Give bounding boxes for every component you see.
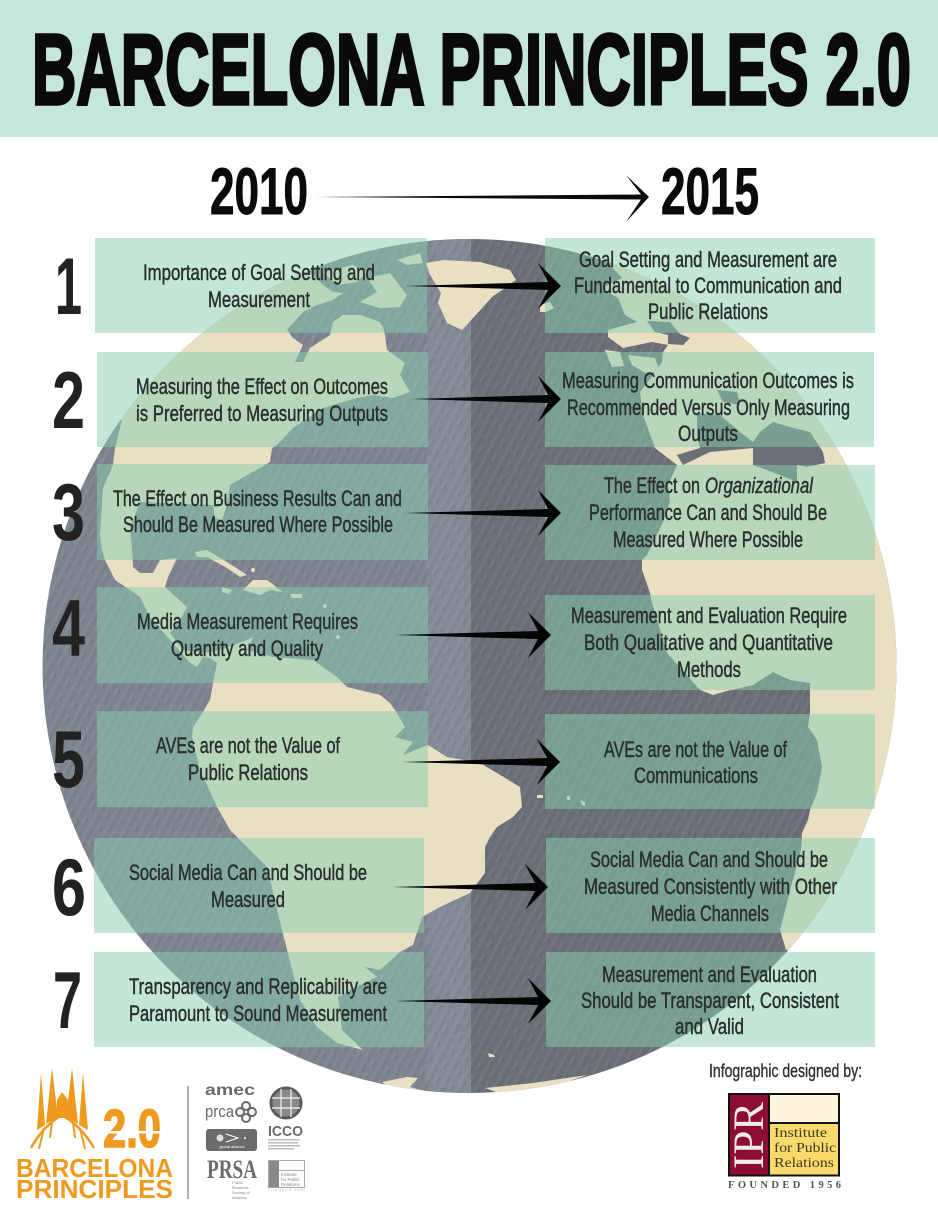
- text: 2010 principles: Paramount to Sound Measurement: [129, 1001, 387, 1026]
- text: 2010 principles: Transparency and Replicability are: [129, 974, 387, 999]
- text: 2015 principles: Both Qualitative and Quantitative: [584, 630, 833, 655]
- logo: IPR small: for Public: [281, 1177, 301, 1182]
- title banner: [0, 0, 938, 137]
- text: 2015 principles: AVEs are not the Value of: [604, 737, 788, 762]
- logo: IPR small: [268, 1160, 305, 1192]
- year header: 2010 to 2015: 2010: [210, 154, 308, 228]
- logo: PRSA: Society of: [232, 1190, 250, 1195]
- text: 2010 principles: Social Media Can and Should be: [129, 860, 367, 885]
- logo: PRSA: America: [232, 1195, 247, 1200]
- world globe background: [42, 239, 896, 1093]
- text: 2010 principles: Measuring the Effect on Outcomes: [136, 374, 388, 399]
- logo name: for Public: [774, 1141, 836, 1156]
- text: 2015 principles: The Effect on: [604, 473, 700, 498]
- text: 2010 principles: AVEs are not the Value of: [156, 733, 341, 758]
- row numbers 1 to 7: 5: [52, 715, 85, 805]
- text: 2015 principles: Outputs: [678, 421, 738, 446]
- text: 2015 principles: [562, 247, 854, 1039]
- logo: PRSA: Relations: [232, 1185, 249, 1190]
- logo numeral 2.0: 2.0: [103, 1099, 161, 1159]
- logo name: [774, 1126, 836, 1171]
- land: Greenland, Arctic islands, Caribbean, Antarctica: [195, 253, 660, 1096]
- arrow: 2010 to 2015: [315, 175, 649, 222]
- text: 2015 principles: Performance Can and Should Be: [589, 500, 827, 525]
- row numbers 1 to 7: 4: [52, 584, 85, 674]
- land: the Americas: [100, 270, 522, 1050]
- text: 2015 principles: Should be Transparent, Consistent: [581, 988, 839, 1013]
- logo: Barcelona Principles 2.0: PRINCIPLES: [16, 1174, 173, 1204]
- logo: ICCO: ICCO: [268, 1123, 303, 1140]
- year header: 2010 to 2015: [210, 154, 759, 228]
- panels: 2010 principles: [94, 238, 428, 1047]
- text: 2015 principles: Measurement and Evaluation Require: [571, 603, 847, 628]
- divider: [187, 1086, 189, 1199]
- text: 2015 principles: Methods: [677, 657, 741, 682]
- logo: IPR small: Institute: [281, 1172, 297, 1177]
- text: 2010 principles: Quantity and Quality: [171, 636, 323, 661]
- logo: amec: amec: [205, 1082, 255, 1099]
- text: 2010 principles: is Preferred to Measuring Outputs: [136, 401, 388, 426]
- row numbers 1 to 7: 3: [52, 468, 85, 558]
- partner logos: [205, 1082, 305, 1200]
- text: 2015 principles: Communications: [634, 763, 758, 788]
- land: Europe, Asia and Africa: [603, 264, 896, 950]
- row numbers 1 to 7: 7: [53, 956, 82, 1046]
- text: 2010 principles: The Effect on Business Results Can and: [113, 486, 402, 511]
- logo: PRSA: PRSA: [207, 1155, 257, 1184]
- logo name: Institute: [774, 1126, 827, 1141]
- logo: PRSA: [207, 1155, 257, 1200]
- row numbers 1 to 7: [52, 242, 86, 1046]
- row numbers 1 to 7: 6: [52, 843, 86, 933]
- logo: PRSA: Public: [232, 1180, 243, 1185]
- logo: global alliance: global alliance: [219, 1144, 245, 1149]
- icon: Sagrada Familia: [31, 1068, 94, 1149]
- logo: IPR small: Relations: [281, 1182, 301, 1187]
- row arrows: [392, 263, 561, 1024]
- text: 2015 principles: Organizational: [705, 473, 814, 498]
- logo: IPR small: FOUNDED 1956: [268, 1188, 305, 1192]
- text: 2015 principles: Goal Setting and Measurement are: [579, 247, 837, 272]
- text: 2010 principles: Measured: [211, 887, 285, 912]
- text: 2010 principles: Should Be Measured Where Possible: [123, 512, 393, 537]
- text: 2010 principles: [113, 260, 402, 1026]
- text: 2010 principles: Importance of Goal Setting and: [143, 260, 375, 285]
- logo letters IPR: IPR: [726, 1102, 773, 1169]
- text: 2015 principles: Public Relations: [648, 299, 768, 324]
- text: 2015 principles: Media Channels: [651, 901, 769, 926]
- logo: prca: prca: [205, 1102, 234, 1121]
- text: 2015 principles: Measurement and Evaluation: [602, 962, 817, 987]
- text: 2015 principles: and Valid: [675, 1014, 744, 1039]
- seas: Baltic, Mediterranean, Black Sea: [647, 321, 825, 482]
- text: 2015 principles: Social Media Can and Should be: [590, 847, 828, 872]
- text: 2010 principles: Measurement: [208, 287, 310, 312]
- credit: infographic designed by: Infographic designed by:: [709, 1061, 862, 1081]
- founded line: FOUNDED 1956: [728, 1180, 841, 1191]
- text: 2015 principles: Measured Where Possible: [613, 527, 803, 552]
- logo: Barcelona Principles 2.0: [16, 1068, 173, 1204]
- logo: Institute for Public Relations: [726, 1093, 841, 1191]
- year header: 2010 to 2015: 2015: [661, 154, 759, 228]
- row numbers 1 to 7: 1: [55, 242, 82, 332]
- panels: 2015 principles: [545, 238, 875, 1047]
- logo wordmark: BARCELONA: [16, 1153, 173, 1183]
- row numbers 1 to 7: 2: [52, 356, 85, 446]
- text: 2015 principles: Fundamental to Communication and: [574, 273, 842, 298]
- logo name: Relations: [774, 1156, 834, 1171]
- text: 2010 principles: Media Measurement Requires: [137, 609, 358, 634]
- text: 2010 principles: Public Relations: [188, 760, 308, 785]
- text: 2015 principles: Measured Consistently with Other: [584, 874, 837, 899]
